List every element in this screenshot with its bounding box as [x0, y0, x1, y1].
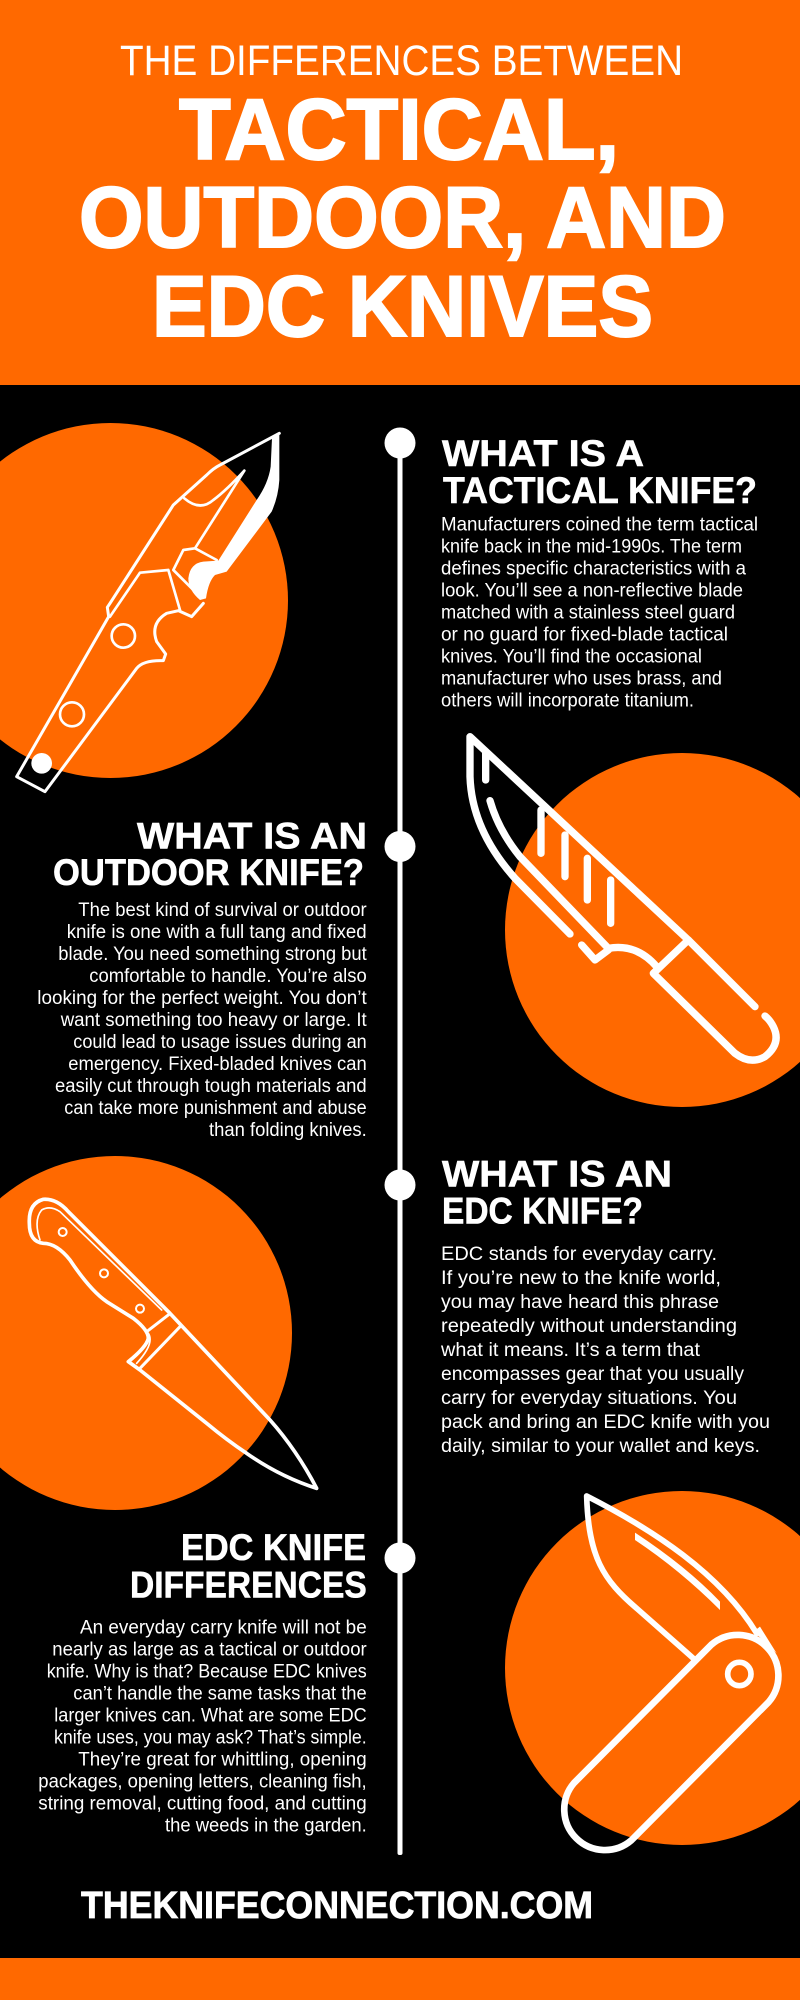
body: edc: repeatedly without understanding — [441, 1316, 737, 1337]
orange circle: tactical — [0, 423, 288, 778]
body: edc: encompasses gear that you usually — [441, 1364, 745, 1385]
panel: edc knife text — [440, 1154, 770, 1457]
timeline — [384, 428, 416, 1855]
body: outdoor: can take more punishment and abuse — [64, 1098, 367, 1119]
body: tactical: Manufacturers coined the term tactical — [441, 515, 758, 536]
heading: outdoor — [53, 815, 367, 893]
main title: TACTICAL, — [179, 82, 619, 178]
body: edc — [440, 1244, 770, 1457]
body: tactical: look. You’ll see a non-reflective blade — [441, 581, 743, 602]
heading: outdoor: OUTDOOR KNIFE? — [53, 852, 364, 893]
body: differences: knife uses, you may ask? That’s simple. — [54, 1727, 367, 1748]
body: tactical: defines specific characteristics with a — [441, 559, 746, 580]
body: edc: carry for everyday situations. You — [441, 1388, 737, 1409]
body: edc: EDC stands for everyday carry. — [441, 1244, 717, 1265]
body: tactical: or no guard for fixed-blade tactical — [441, 625, 728, 646]
body: differences: knife. Why is that? Because EDC knives — [47, 1661, 367, 1682]
body: differences: can’t handle the same tasks that the — [73, 1683, 367, 1704]
body: differences: An everyday carry knife will not be — [80, 1617, 367, 1638]
body: differences: larger knives can. What are some EDC — [54, 1705, 367, 1726]
heading: outdoor: WHAT IS AN — [137, 815, 367, 856]
heading: edc: WHAT IS AN — [442, 1154, 672, 1195]
title kicker: THE DIFFERENCES BETWEEN — [120, 37, 683, 85]
body: outdoor — [37, 900, 367, 1141]
body: edc: daily, similar to your wallet and keys. — [441, 1436, 760, 1457]
icon: chef style knife — [29, 1199, 317, 1488]
body: edc: If you’re new to the knife world, — [441, 1268, 721, 1289]
body: edc: what it means. It’s a term that — [440, 1340, 701, 1361]
footer url: THEKNIFECONNECTION.COM — [81, 1885, 593, 1927]
body: tactical — [441, 515, 758, 712]
heading: tactical: WHAT IS A — [442, 433, 644, 474]
heading: tactical — [442, 433, 757, 511]
heading: edc: EDC KNIFE? — [442, 1190, 643, 1231]
body: outdoor: emergency. Fixed-bladed knives can — [68, 1054, 367, 1075]
heading: differences: EDC KNIFE — [181, 1527, 366, 1568]
heading: differences — [130, 1527, 367, 1605]
body: outdoor: The best kind of survival or outdoor — [78, 900, 367, 921]
panel: tactical knife text — [441, 433, 758, 712]
body: outdoor: want something too heavy or large. It — [60, 1010, 367, 1031]
footer band — [0, 1958, 800, 2000]
icon: outdoor knife — [470, 737, 776, 1060]
body: outdoor: could lead to usage issues during an — [73, 1032, 367, 1053]
heading: differences: DIFFERENCES — [130, 1564, 367, 1605]
icon: tactical knife — [17, 433, 279, 792]
body: tactical: others will incorporate titanium. — [441, 691, 694, 712]
body: differences: packages, opening letters, cleaning fish, — [38, 1771, 367, 1792]
body: outdoor: than folding knives. — [209, 1120, 367, 1141]
heading: tactical: TACTICAL KNIFE? — [443, 470, 757, 511]
heading: edc — [442, 1154, 672, 1231]
main title: OUTDOOR, AND — [79, 170, 726, 266]
body: outdoor: knife is one with a full tang and fixed — [67, 922, 367, 943]
body: tactical: knives. You’ll find the occasional — [441, 647, 702, 668]
body: differences — [38, 1617, 367, 1836]
body: outdoor: blade. You need something strong but — [58, 944, 367, 965]
body: differences: They’re great for whittling, opening — [78, 1749, 367, 1770]
body: tactical: knife back in the mid-1990s. The term — [441, 537, 742, 558]
body: outdoor: looking for the perfect weight. You don’t — [37, 988, 367, 1009]
main title: EDC KNIVES — [152, 259, 653, 355]
body: differences: nearly as large as a tactical or outdoor — [52, 1639, 367, 1660]
icon: folding knife — [564, 1496, 778, 1850]
orange circle: edc definition — [0, 1156, 292, 1510]
body: outdoor: comfortable to handle. You’re also — [89, 966, 367, 987]
orange circle: folding knife — [505, 1491, 800, 1845]
body: edc: you may have heard this phrase — [441, 1292, 719, 1313]
orange circle: outdoor — [505, 753, 800, 1107]
main title — [79, 82, 726, 355]
title banner — [0, 0, 800, 385]
body: tactical: matched with a stainless steel guard — [441, 603, 735, 624]
body: tactical: manufacturer who uses brass, and — [441, 669, 722, 690]
body: differences: the weeds in the garden. — [165, 1815, 367, 1836]
body: outdoor: easily cut through tough materials and — [55, 1076, 367, 1097]
body: edc: pack and bring an EDC knife with you — [441, 1412, 770, 1433]
panel: outdoor knife text — [37, 815, 367, 1141]
body: differences: string removal, cutting food, and cutting — [38, 1793, 367, 1814]
panel: edc differences text — [38, 1527, 367, 1836]
